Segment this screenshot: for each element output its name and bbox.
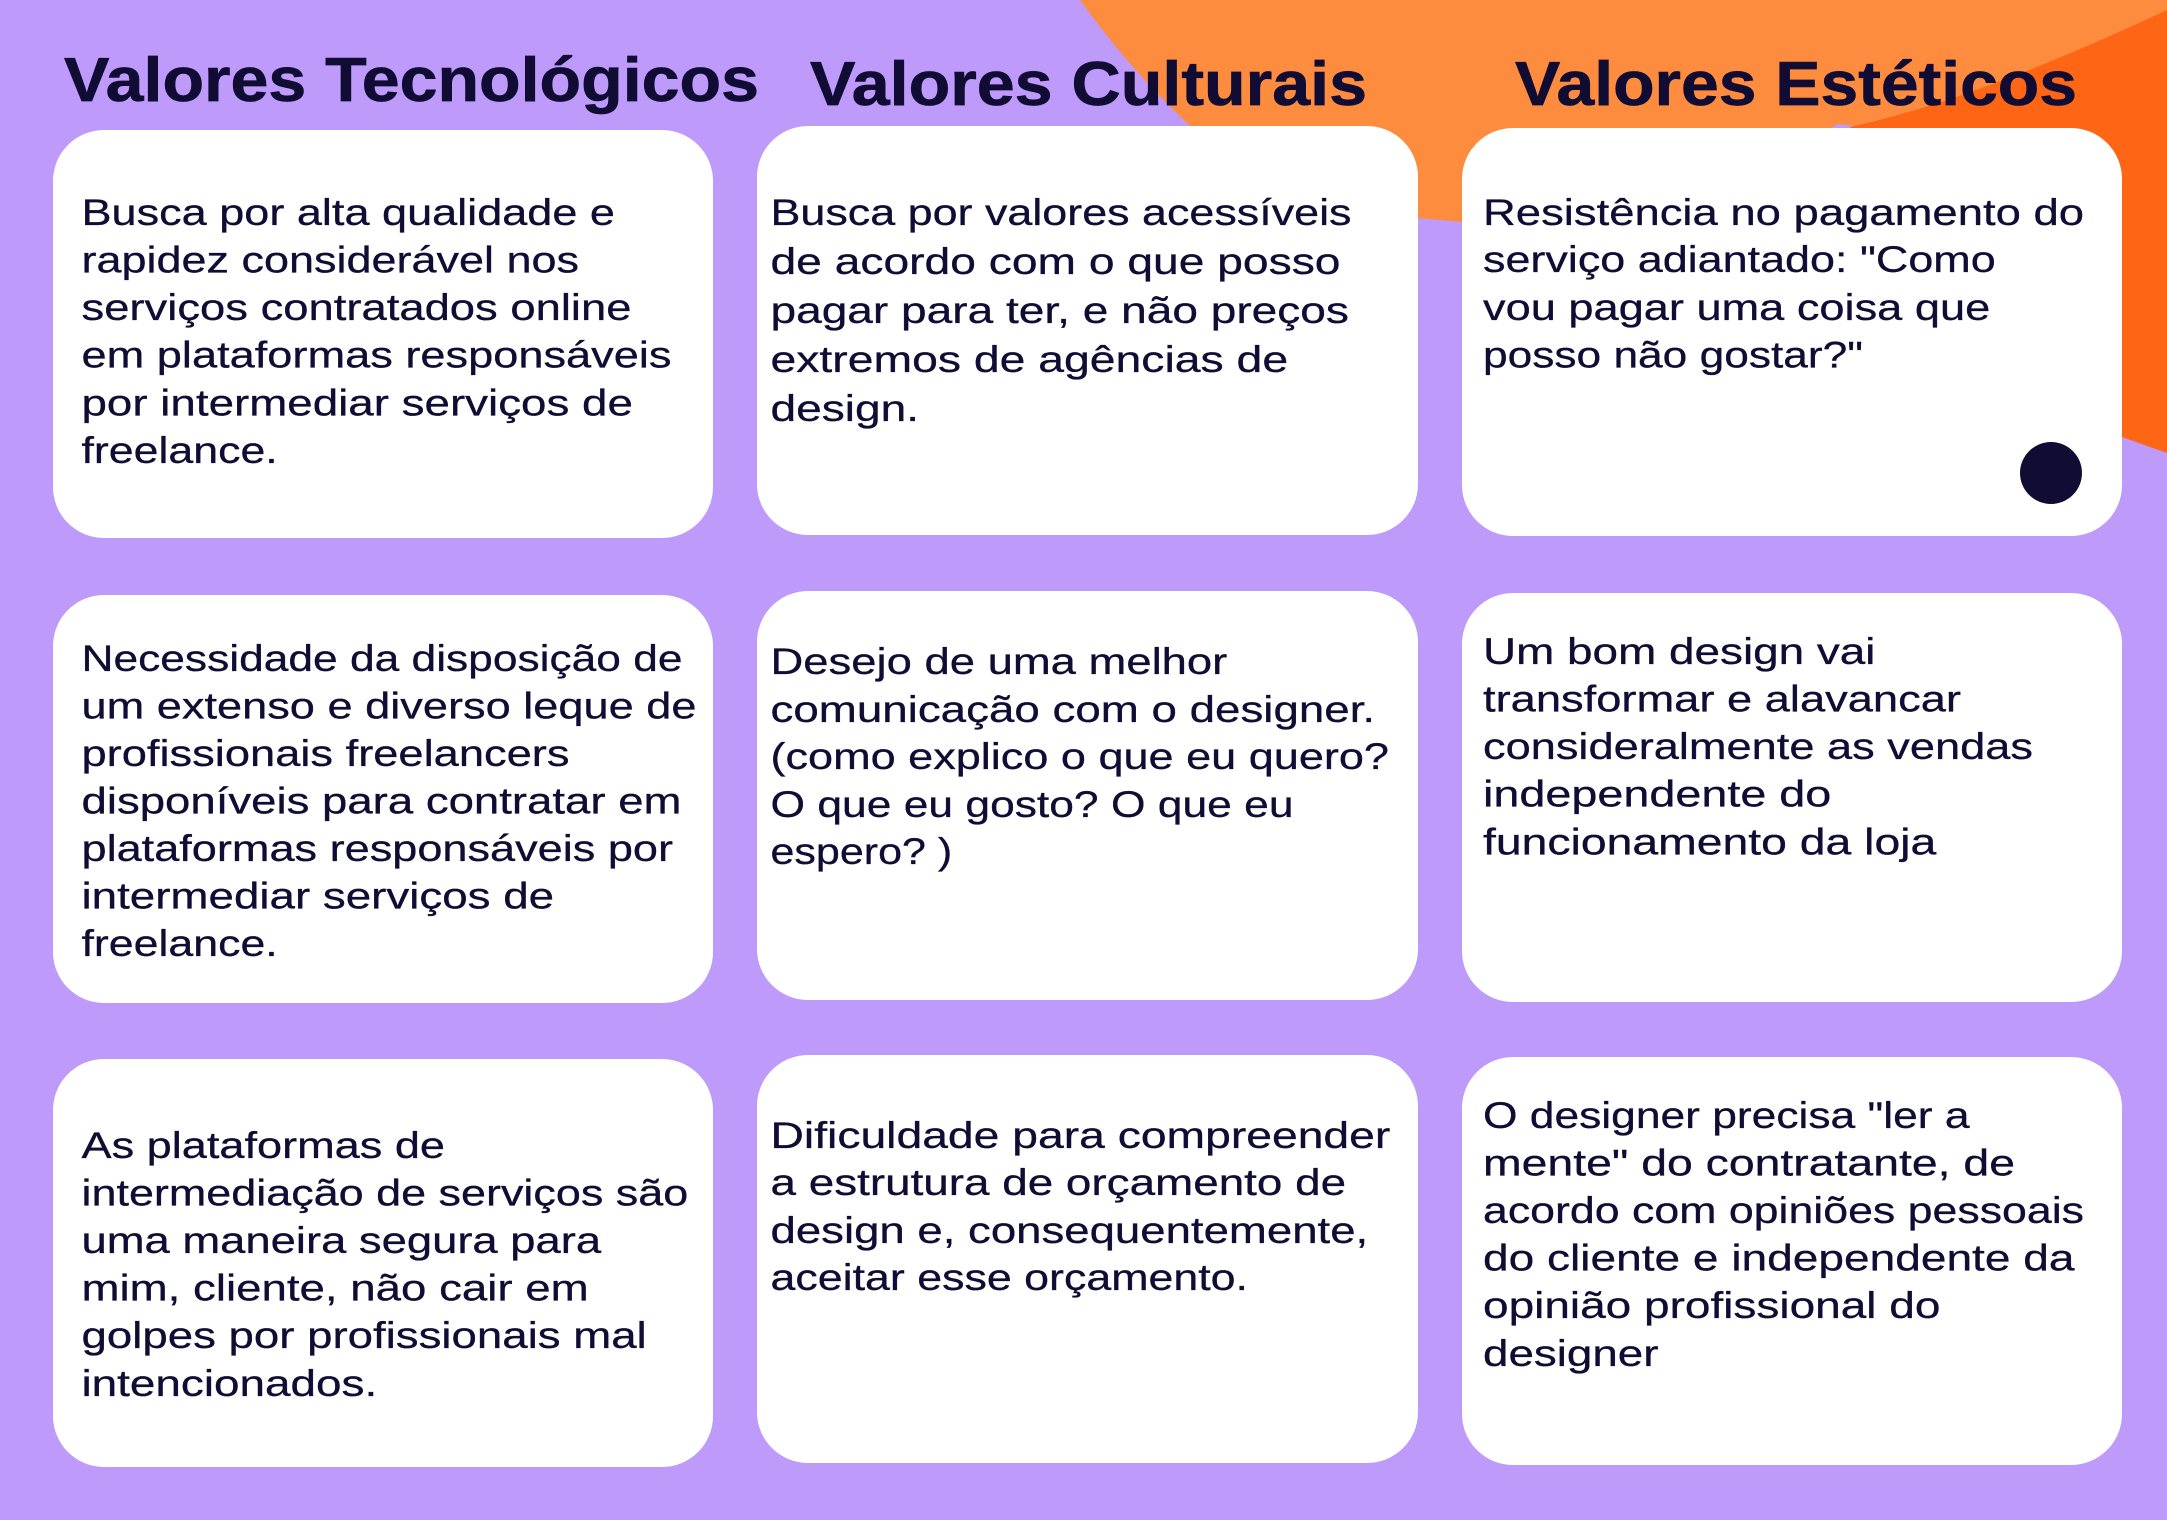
card text — [1483, 630, 2033, 862]
card text: Busca por valores acessíveis — [770, 191, 1352, 233]
card text: serviço adiantado: "Como — [1483, 238, 1996, 280]
card text: pagar para ter, e não preços — [770, 289, 1349, 331]
card text: extremos de agências de — [770, 338, 1288, 380]
card text: por intermediar serviços de — [82, 381, 633, 423]
heading: Valores Tecnológicos: Valores Tecnológicos — [64, 46, 759, 115]
card text: Um bom design vai — [1483, 630, 1876, 672]
card text: em plataformas responsáveis — [82, 334, 672, 376]
card text — [770, 640, 1389, 872]
card: estéticos 1 — [1462, 128, 2122, 536]
card text: O que eu gosto? O que eu — [770, 783, 1294, 825]
card text: funcionamento da loja — [1483, 820, 1936, 862]
card text — [82, 1124, 688, 1404]
card text: vou pagar uma coisa que — [1483, 286, 1990, 328]
card text: a estrutura de orçamento de — [770, 1161, 1346, 1203]
dark orange blob — [1850, 10, 2167, 453]
card text — [1483, 1094, 2084, 1374]
card text: (como explico o que eu quero? — [770, 735, 1389, 777]
card text: As plataformas de — [82, 1124, 445, 1166]
card text: espero? ) — [770, 830, 952, 872]
card text: intermediação de serviços são — [82, 1172, 688, 1214]
card text: Dificuldade para compreender — [770, 1114, 1390, 1156]
card: estéticos 3 — [1462, 1057, 2122, 1465]
card text: transformar e alavancar — [1483, 678, 1961, 720]
card text: serviços contratados online — [82, 286, 632, 328]
card text: posso não gostar?" — [1483, 334, 1863, 376]
card text: comunicação com o designer. — [770, 688, 1375, 730]
card text: intencionados. — [82, 1362, 377, 1404]
card text: aceitar esse orçamento. — [770, 1256, 1248, 1298]
card: culturais 1 — [757, 126, 1418, 535]
card text: disponíveis para contratar em — [82, 780, 682, 822]
light orange blob — [1080, 0, 2167, 222]
card text: um extenso e diverso leque de — [82, 684, 696, 726]
card text: intermediar serviços de — [82, 875, 554, 917]
card text: mente" do contratante, de — [1483, 1142, 2015, 1184]
card text: Resistência no pagamento do — [1483, 191, 2084, 233]
card text: Busca por alta qualidade e — [82, 191, 615, 233]
card: culturais 3 — [757, 1055, 1418, 1463]
card text: plataformas responsáveis por — [82, 827, 673, 869]
card text: Desejo de uma melhor — [770, 640, 1227, 682]
heading: Valores Culturais: Valores Culturais — [810, 50, 1367, 119]
card text — [770, 1114, 1390, 1298]
card text: consideralmente as vendas — [1483, 725, 2033, 767]
card text: freelance. — [82, 922, 278, 964]
card text: opinião profissional do — [1483, 1284, 1940, 1326]
card text: mim, cliente, não cair em — [82, 1267, 589, 1309]
card text — [82, 191, 672, 471]
card text: de acordo com o que posso — [770, 240, 1340, 282]
card text — [770, 191, 1352, 429]
card text: do cliente e independente da — [1483, 1237, 2075, 1279]
card text: freelance. — [82, 429, 278, 471]
card text: Necessidade da disposição de — [82, 637, 682, 679]
card text: design. — [770, 387, 919, 429]
card text: independente do — [1483, 773, 1831, 815]
card: tecnológicos 1 — [53, 130, 713, 538]
card text: golpes por profissionais mal — [82, 1314, 647, 1356]
card text — [82, 637, 696, 964]
card text: acordo com opiniões pessoais — [1483, 1189, 2084, 1231]
card: culturais 2 — [757, 591, 1418, 1000]
card text: uma maneira segura para — [82, 1219, 601, 1261]
icon: navy dot — [2020, 442, 2082, 504]
heading: Valores Estéticos: Valores Estéticos — [1515, 50, 2077, 119]
card: tecnológicos 2 — [53, 595, 713, 1003]
card text: design e, consequentemente, — [770, 1209, 1368, 1251]
card: tecnológicos 3 — [53, 1059, 713, 1467]
card text: designer — [1483, 1332, 1658, 1374]
card: estéticos 2 — [1462, 593, 2122, 1002]
card text: O designer precisa "ler a — [1483, 1094, 1970, 1136]
card text: rapidez considerável nos — [82, 239, 579, 281]
card text — [1483, 191, 2084, 376]
card text: profissionais freelancers — [82, 732, 570, 774]
